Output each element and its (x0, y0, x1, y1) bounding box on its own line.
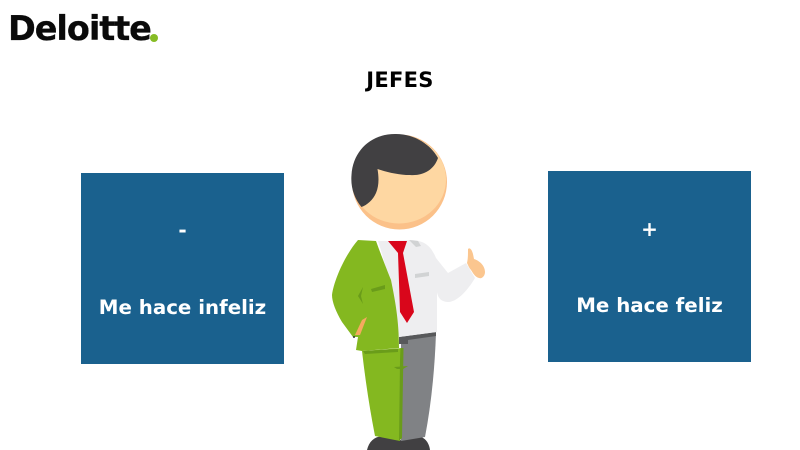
trousers (362, 332, 436, 441)
panel: negative (81, 173, 284, 364)
logo: Deloitte: Deloitte (8, 9, 151, 48)
negative label: Me hace infeliz (99, 296, 266, 318)
jacket (332, 240, 399, 351)
head (351, 134, 447, 230)
shirt and arm (378, 240, 475, 337)
plus sign: + (641, 217, 658, 241)
minus sign: - (178, 218, 187, 242)
positive label: Me hace feliz (576, 294, 723, 316)
title: JEFES (366, 68, 434, 92)
tie (388, 241, 414, 323)
shoes (367, 436, 430, 450)
hand: thumbs up (467, 248, 485, 278)
panel: positive (548, 171, 751, 362)
